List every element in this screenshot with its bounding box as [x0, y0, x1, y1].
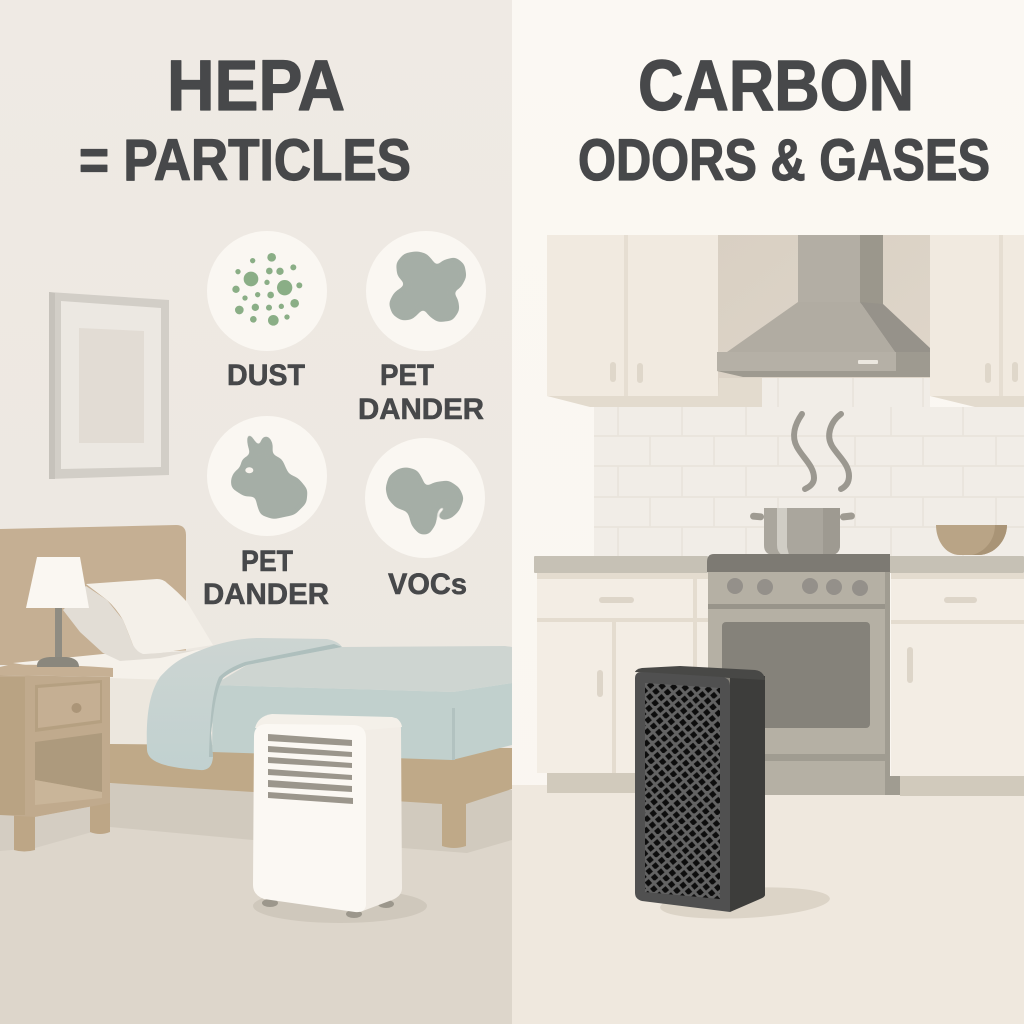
- bedding: cover and fold: [147, 638, 512, 770]
- stove: [707, 554, 900, 795]
- bed base and leg: [110, 744, 512, 848]
- base cabinets left: [537, 573, 708, 793]
- hood alcove wall: [718, 235, 930, 407]
- icon: VOCs blob: [365, 438, 485, 558]
- backsplash tiles: [594, 378, 1024, 557]
- upper cabinets right: [930, 235, 1024, 407]
- label: VOCs: VOCs: [388, 568, 467, 601]
- nightstand: [0, 665, 113, 852]
- label: PET DANDER left: PET: [241, 545, 293, 578]
- mattress: [13, 650, 240, 746]
- range hood: [717, 235, 930, 377]
- counters: [534, 556, 1024, 573]
- heading: HEPA: HEPA: [167, 47, 345, 126]
- panel: HEPA bedroom: [0, 0, 512, 1024]
- bedside lamp: [26, 557, 89, 667]
- carbon purifier: [635, 666, 765, 912]
- HEPA purifier: [253, 714, 402, 918]
- label: DUST: DUST: [227, 359, 305, 392]
- headboard: [0, 525, 186, 665]
- icon: pet silhouette: [207, 416, 327, 536]
- floor shadow under HEPA purifier: [253, 889, 427, 923]
- icon: dust: [207, 231, 327, 351]
- cooking pot: [750, 508, 855, 555]
- icon: pet dander blob: [366, 231, 486, 351]
- bowl: [936, 525, 1007, 555]
- label: PET DANDER right: PET: [380, 359, 434, 392]
- heading: = PARTICLES: = PARTICLES: [79, 128, 411, 193]
- panel: Carbon kitchen: [512, 0, 1024, 1024]
- upper cabinets left: [547, 235, 762, 407]
- heading: CARBON: CARBON: [638, 47, 914, 126]
- floor: bedroom carpet: [0, 825, 512, 1024]
- under-bed shadow: [105, 783, 512, 853]
- nightstand floor shadow: [0, 803, 110, 851]
- picture frame: [49, 292, 169, 479]
- steam: [794, 414, 849, 489]
- label: PET DANDER left: DANDER: [203, 578, 329, 611]
- label: PET DANDER right: DANDER: [358, 393, 484, 426]
- floor shadow under carbon purifier: [659, 884, 831, 922]
- base cabinets right: [891, 573, 1024, 796]
- pillow: [63, 579, 213, 661]
- floor: kitchen: [512, 785, 1024, 1024]
